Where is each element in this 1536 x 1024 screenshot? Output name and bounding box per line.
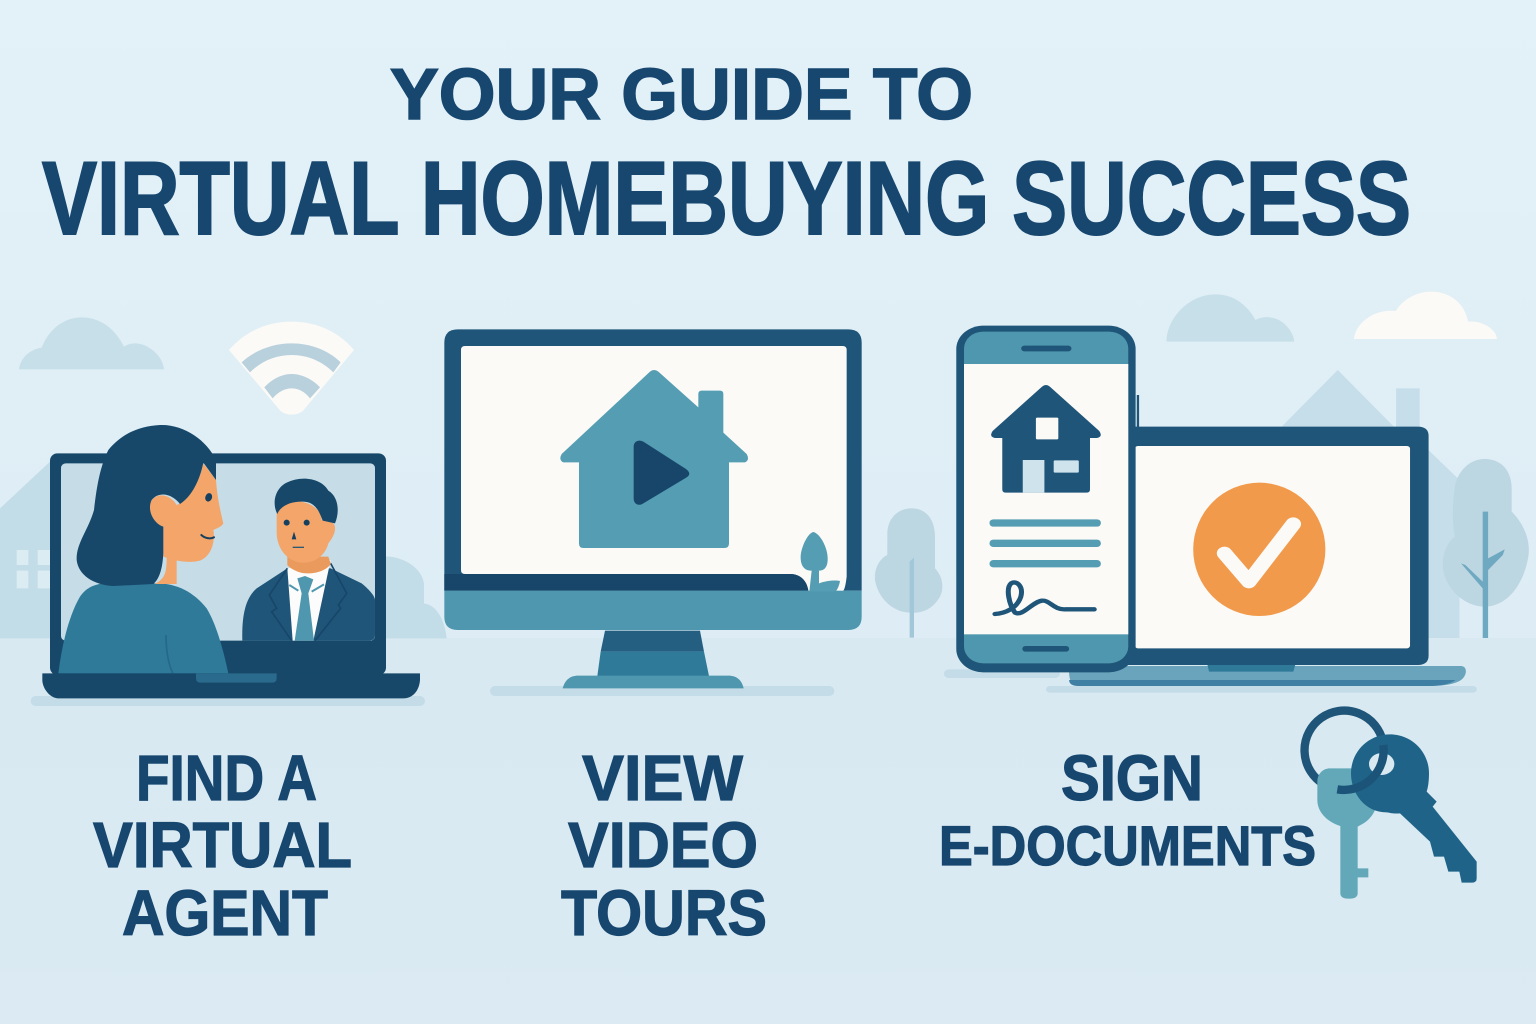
phone inner bbox=[964, 332, 1128, 663]
label: view video tours: VIDEO bbox=[568, 809, 758, 881]
document lines bbox=[990, 519, 1101, 567]
man in suit bbox=[242, 479, 375, 641]
laptop hinge bbox=[1208, 665, 1295, 672]
phone body bbox=[956, 326, 1136, 672]
laptop shadow bbox=[31, 696, 425, 706]
ground bbox=[0, 638, 1536, 1024]
label: find a virtual agent: VIRTUAL bbox=[93, 809, 352, 881]
laptop base bbox=[1069, 666, 1466, 686]
label: find a virtual agent: FIND A bbox=[136, 742, 317, 814]
background sky bbox=[0, 0, 1536, 640]
laptop shadow bbox=[1046, 686, 1477, 693]
background scene left: cloud, house and bush bbox=[0, 317, 447, 638]
laptop screen bbox=[61, 463, 375, 641]
monitor frame bbox=[444, 329, 862, 591]
phone speaker bbox=[1021, 346, 1071, 351]
label: view video tours bbox=[561, 742, 767, 949]
woman with laptop bbox=[58, 425, 228, 673]
icon: orange check badge bbox=[1193, 483, 1325, 616]
monitor screen bbox=[461, 346, 847, 591]
laptop with video call bbox=[31, 425, 425, 706]
label: sign e-documents: SIGN bbox=[1061, 742, 1203, 814]
title line one: YOUR GUIDE TO bbox=[390, 55, 973, 135]
icon: house with play button bbox=[560, 370, 748, 548]
label: find a virtual agent bbox=[93, 742, 352, 949]
laptop frame bbox=[50, 453, 386, 675]
background scene right: clouds, house and tree bbox=[1167, 292, 1529, 638]
monitor stand bbox=[601, 631, 704, 652]
laptop lid bbox=[1127, 395, 1429, 665]
background tree between monitor and phone bbox=[875, 508, 942, 638]
phone home bar bbox=[1022, 646, 1069, 652]
laptop trackpad bbox=[196, 673, 277, 683]
icon: wifi signal bbox=[229, 322, 354, 415]
laptop screen bbox=[1135, 446, 1410, 648]
desktop monitor with video tour bbox=[444, 329, 862, 696]
small tree on screen bbox=[801, 532, 840, 592]
monitor foot bbox=[563, 676, 744, 688]
label: view video tours: TOURS bbox=[561, 877, 767, 949]
label: sign e-documents: E-DOCUMENTS bbox=[939, 814, 1316, 877]
phone screen bbox=[964, 364, 1128, 634]
monitor shadow bbox=[490, 686, 834, 696]
phone with e-document bbox=[944, 326, 1136, 678]
icon: house on phone bbox=[991, 385, 1101, 493]
laptop base bbox=[42, 673, 420, 698]
phone shadow bbox=[944, 669, 1060, 678]
label: find a virtual agent: AGENT bbox=[122, 877, 328, 949]
label: view video tours: VIEW bbox=[582, 742, 744, 814]
monitor chin bbox=[444, 591, 862, 630]
signature bbox=[995, 582, 1094, 614]
laptop with checkmark bbox=[1046, 395, 1477, 693]
icon: house keys bbox=[1305, 711, 1477, 899]
label: sign e-documents bbox=[939, 742, 1316, 877]
